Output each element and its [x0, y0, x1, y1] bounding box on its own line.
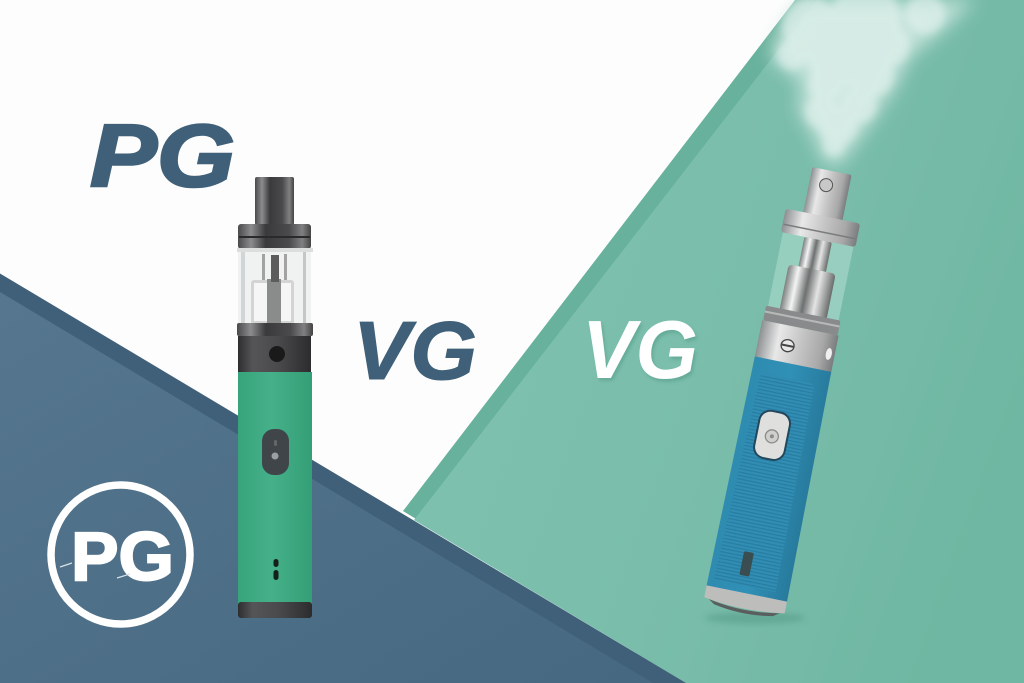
- badge: PG circle: PG: [71, 518, 174, 595]
- smoke plume: [770, 0, 975, 165]
- device: green vape pen: [237, 177, 313, 618]
- device shadow: [705, 612, 805, 624]
- battery slot: [739, 551, 754, 577]
- metal section: [754, 320, 839, 375]
- button: [262, 429, 289, 475]
- button: [751, 408, 793, 463]
- glass tank: [767, 231, 854, 325]
- vents: [274, 559, 278, 580]
- panel: blue PG side: [0, 274, 686, 683]
- foot: [238, 602, 312, 618]
- side knob: [825, 347, 833, 360]
- heading: VG white: VG: [582, 303, 698, 396]
- glass tank: [238, 250, 311, 325]
- heading: VG dark: VG: [353, 304, 477, 397]
- panel: green VG side: [403, 0, 1024, 683]
- logo: [818, 177, 834, 193]
- ribbed grip: [714, 372, 818, 592]
- air slot: [780, 339, 795, 353]
- badge: PG circle: [51, 485, 190, 624]
- mouthpiece: [803, 167, 852, 222]
- air hole: [269, 346, 285, 362]
- collar: [781, 209, 860, 247]
- heading: VG white shadow: VG: [584, 306, 700, 399]
- green body: [238, 372, 312, 604]
- heading: PG dark: PG: [90, 106, 235, 205]
- lower ring: [763, 306, 841, 335]
- mouthpiece: [255, 177, 294, 225]
- dark section: [238, 336, 311, 373]
- top collar: [238, 224, 311, 249]
- metal foot: [704, 585, 787, 617]
- blue body: [706, 356, 833, 603]
- lower ring: [237, 323, 313, 336]
- device: blue vape pen: [703, 163, 872, 621]
